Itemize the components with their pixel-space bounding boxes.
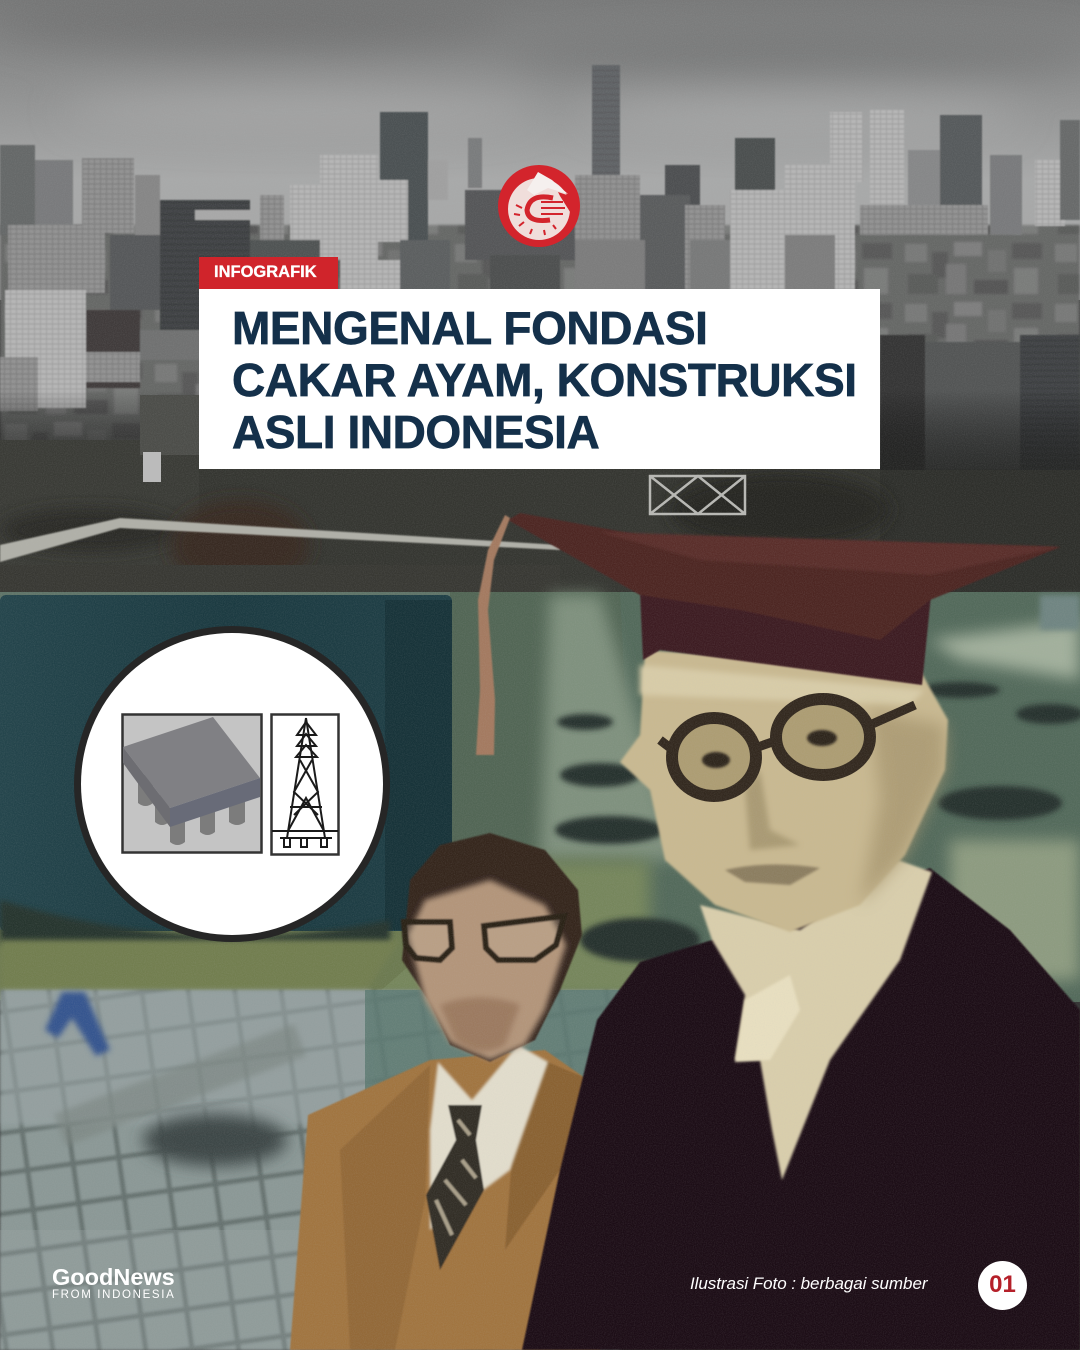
photo credit: Ilustrasi Foto : berbagai sumber xyxy=(690,1274,927,1293)
gown xyxy=(522,868,1080,1350)
brand: GoodNews from Indonesia xyxy=(52,1264,175,1301)
page number xyxy=(978,1261,1027,1310)
title xyxy=(199,289,880,469)
brand: GoodNews from Indonesia: GoodNews xyxy=(52,1264,175,1290)
page number: 01 xyxy=(989,1271,1016,1298)
glasses xyxy=(404,916,564,960)
glasses xyxy=(672,699,870,796)
tassel xyxy=(476,515,510,755)
tag: infografik: INFOGRAFIK xyxy=(214,263,317,281)
head xyxy=(402,833,582,1062)
portrait: smaller man in brown suit xyxy=(290,833,600,1350)
jacket xyxy=(290,1050,600,1350)
cap body xyxy=(640,585,932,685)
city skyline photo xyxy=(0,0,1080,595)
title: CAKAR AYAM, KONSTRUKSI xyxy=(232,354,857,406)
brand: GoodNews from Indonesia: FROM INDONESIA xyxy=(52,1289,175,1301)
title: MENGENAL FONDASI xyxy=(232,302,707,354)
pile cap foundation drawing xyxy=(122,714,262,852)
cap board xyxy=(508,513,1060,640)
collar and shirt xyxy=(700,860,932,1180)
shirt and tie xyxy=(430,1045,548,1230)
logo badge xyxy=(498,165,580,247)
construction site photo xyxy=(0,592,1080,1350)
title: ASLI INDONESIA xyxy=(232,406,599,458)
portrait: larger man in graduation gown and cap xyxy=(476,513,1080,1350)
diagram circle xyxy=(74,626,390,942)
face xyxy=(620,650,948,932)
tag: infografik xyxy=(199,257,338,289)
transmission tower drawing xyxy=(272,714,338,854)
